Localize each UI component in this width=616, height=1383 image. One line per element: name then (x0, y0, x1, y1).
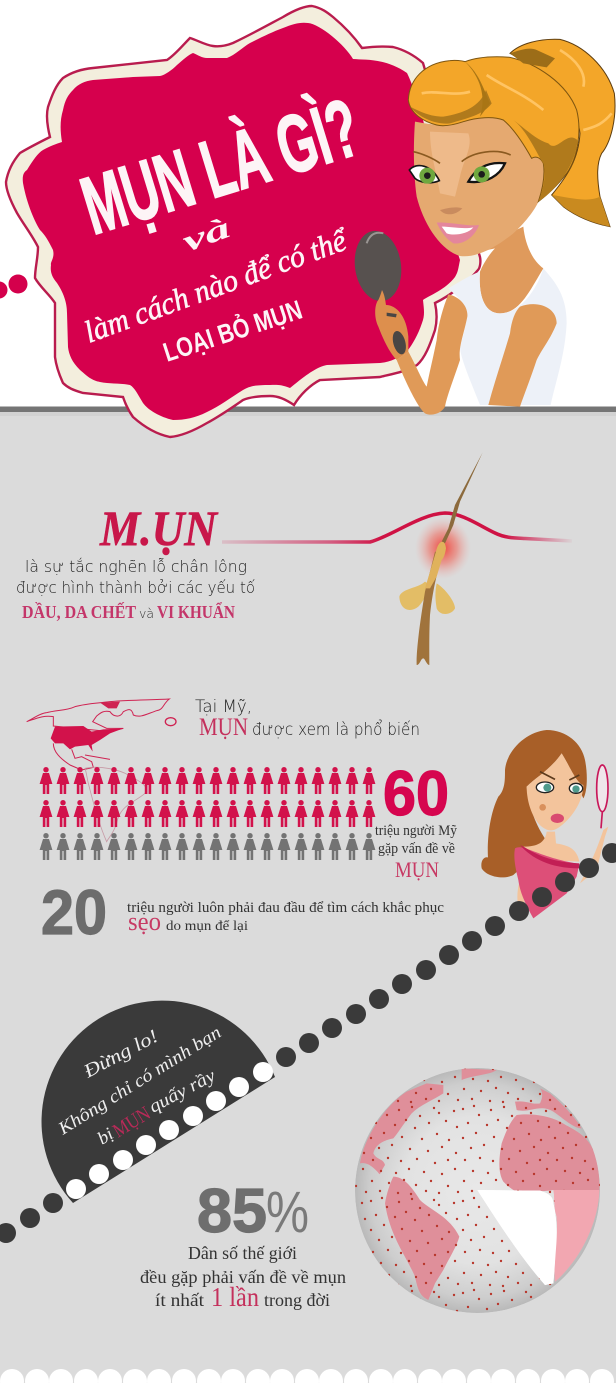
face (527, 753, 583, 830)
continent: europe (515, 1088, 582, 1128)
illustration: blonde woman with mirror (350, 39, 615, 415)
globe chart (355, 1068, 600, 1313)
arms (397, 294, 467, 415)
stat: 60 million: 60 (383, 759, 449, 829)
definition text: là sự tắc nghẽn lỗ chân lông (25, 557, 247, 576)
stat: 85 percent: 1 lần (211, 1282, 259, 1312)
continent: africa upper (499, 1114, 599, 1195)
definition text: DẦU, DA CHẾT (22, 601, 136, 622)
stat: 85 percent: đều gặp phải vấn đề về mụn (140, 1267, 346, 1287)
stat: 85 percent: trong đời (264, 1290, 330, 1310)
scalloped footer (0, 1369, 614, 1383)
neck (460, 227, 543, 313)
continent: greenland (462, 1068, 497, 1080)
definition text: và (139, 607, 154, 621)
definition text: VI KHUẨN (157, 601, 235, 622)
definition text (16, 557, 255, 622)
brows (413, 152, 511, 163)
mirror (350, 228, 406, 304)
hair (481, 730, 587, 877)
neck and chest (523, 832, 579, 862)
dotted diagonal line (0, 843, 616, 1243)
text: Tại Mỹ (195, 697, 420, 741)
mirror handle (387, 313, 397, 317)
text: Tại Mỹ: MỤN (199, 714, 248, 741)
title: MỤN LÀ GÌ?: MỤN LÀ GÌ? (72, 82, 370, 252)
hand (375, 290, 408, 360)
callout: don't worry dome: Không chỉ có mình bạn (54, 1022, 225, 1139)
callout: don't worry dome: quấy rầy (145, 1065, 218, 1117)
stat: 60 million (375, 759, 457, 882)
callout: don't worry dome: Đừng lo! (79, 1026, 162, 1083)
skin line (222, 513, 572, 542)
map: north america with USA highlighted (27, 699, 176, 842)
stat: 85 percent: % (266, 1180, 309, 1245)
top (448, 268, 567, 405)
stat: 20 million: do mụn để lại (166, 919, 248, 934)
hair shaft (442, 452, 483, 543)
front hair (408, 57, 579, 202)
callout: don't worry dome (42, 1001, 275, 1203)
thought-bubble dots (0, 274, 28, 298)
continent: white wedge (514, 1190, 557, 1285)
stat: 60 million: gặp vấn đề về (378, 841, 455, 857)
mirror (597, 765, 608, 812)
stat: 85 percent: ít nhất (155, 1290, 204, 1310)
text: Tại Mỹ: Tại Mỹ, (195, 697, 252, 717)
mouth (437, 223, 479, 244)
dress (514, 847, 579, 918)
follicle stem (417, 552, 443, 665)
pimple (539, 804, 546, 811)
arm (517, 827, 608, 915)
eyes (536, 782, 554, 793)
stat: 20 million: sẹo (128, 907, 161, 936)
stat: 60 million: MỤN (395, 857, 439, 882)
illustration: brunette woman with hand mirror (481, 730, 608, 918)
pictogram: people affected (40, 767, 375, 860)
stat: 20 million: 20 (41, 878, 107, 948)
text: Tại Mỹ: được xem là phổ biến (252, 718, 420, 740)
face (414, 118, 544, 256)
subtitle: loại bỏ mụn: LOẠI BỎ MỤN (159, 293, 306, 368)
continent: south america (385, 1177, 459, 1300)
ponytail (510, 39, 615, 227)
stat: 85 percent: Dân số thế giới (188, 1243, 297, 1263)
eyes (409, 166, 439, 183)
illustration: pore and hair follicle (222, 452, 572, 665)
stat: 20 million (41, 878, 444, 948)
subtitle: và: và (178, 211, 234, 259)
continent: africa lower highlight (553, 1190, 599, 1282)
stat: 20 million: triệu người luôn phải đau đầu để tìm cách khắc phục (127, 900, 444, 916)
definition text: được hình thành bởi các yếu tố (16, 578, 255, 597)
continent: north america (360, 1083, 443, 1174)
white wedge mask over dots (477, 1190, 599, 1285)
subtitle: làm cách nào: làm cách nào để có thể (79, 221, 354, 350)
nose (440, 207, 462, 214)
stat: 85 percent (140, 1177, 346, 1312)
glands (399, 582, 430, 610)
infection dots (355, 1068, 600, 1312)
title bubble (6, 6, 480, 437)
callout: don't worry dome: bị (94, 1123, 117, 1148)
callout: don't worry dome: MỤN (109, 1102, 155, 1142)
stat: 60 million: triệu người Mỹ (375, 823, 457, 839)
stat: 85 percent: 85 (197, 1177, 267, 1246)
lips (551, 814, 564, 823)
heading: M.ỤN: M.ỤN (99, 500, 219, 556)
inflammation (415, 517, 471, 579)
